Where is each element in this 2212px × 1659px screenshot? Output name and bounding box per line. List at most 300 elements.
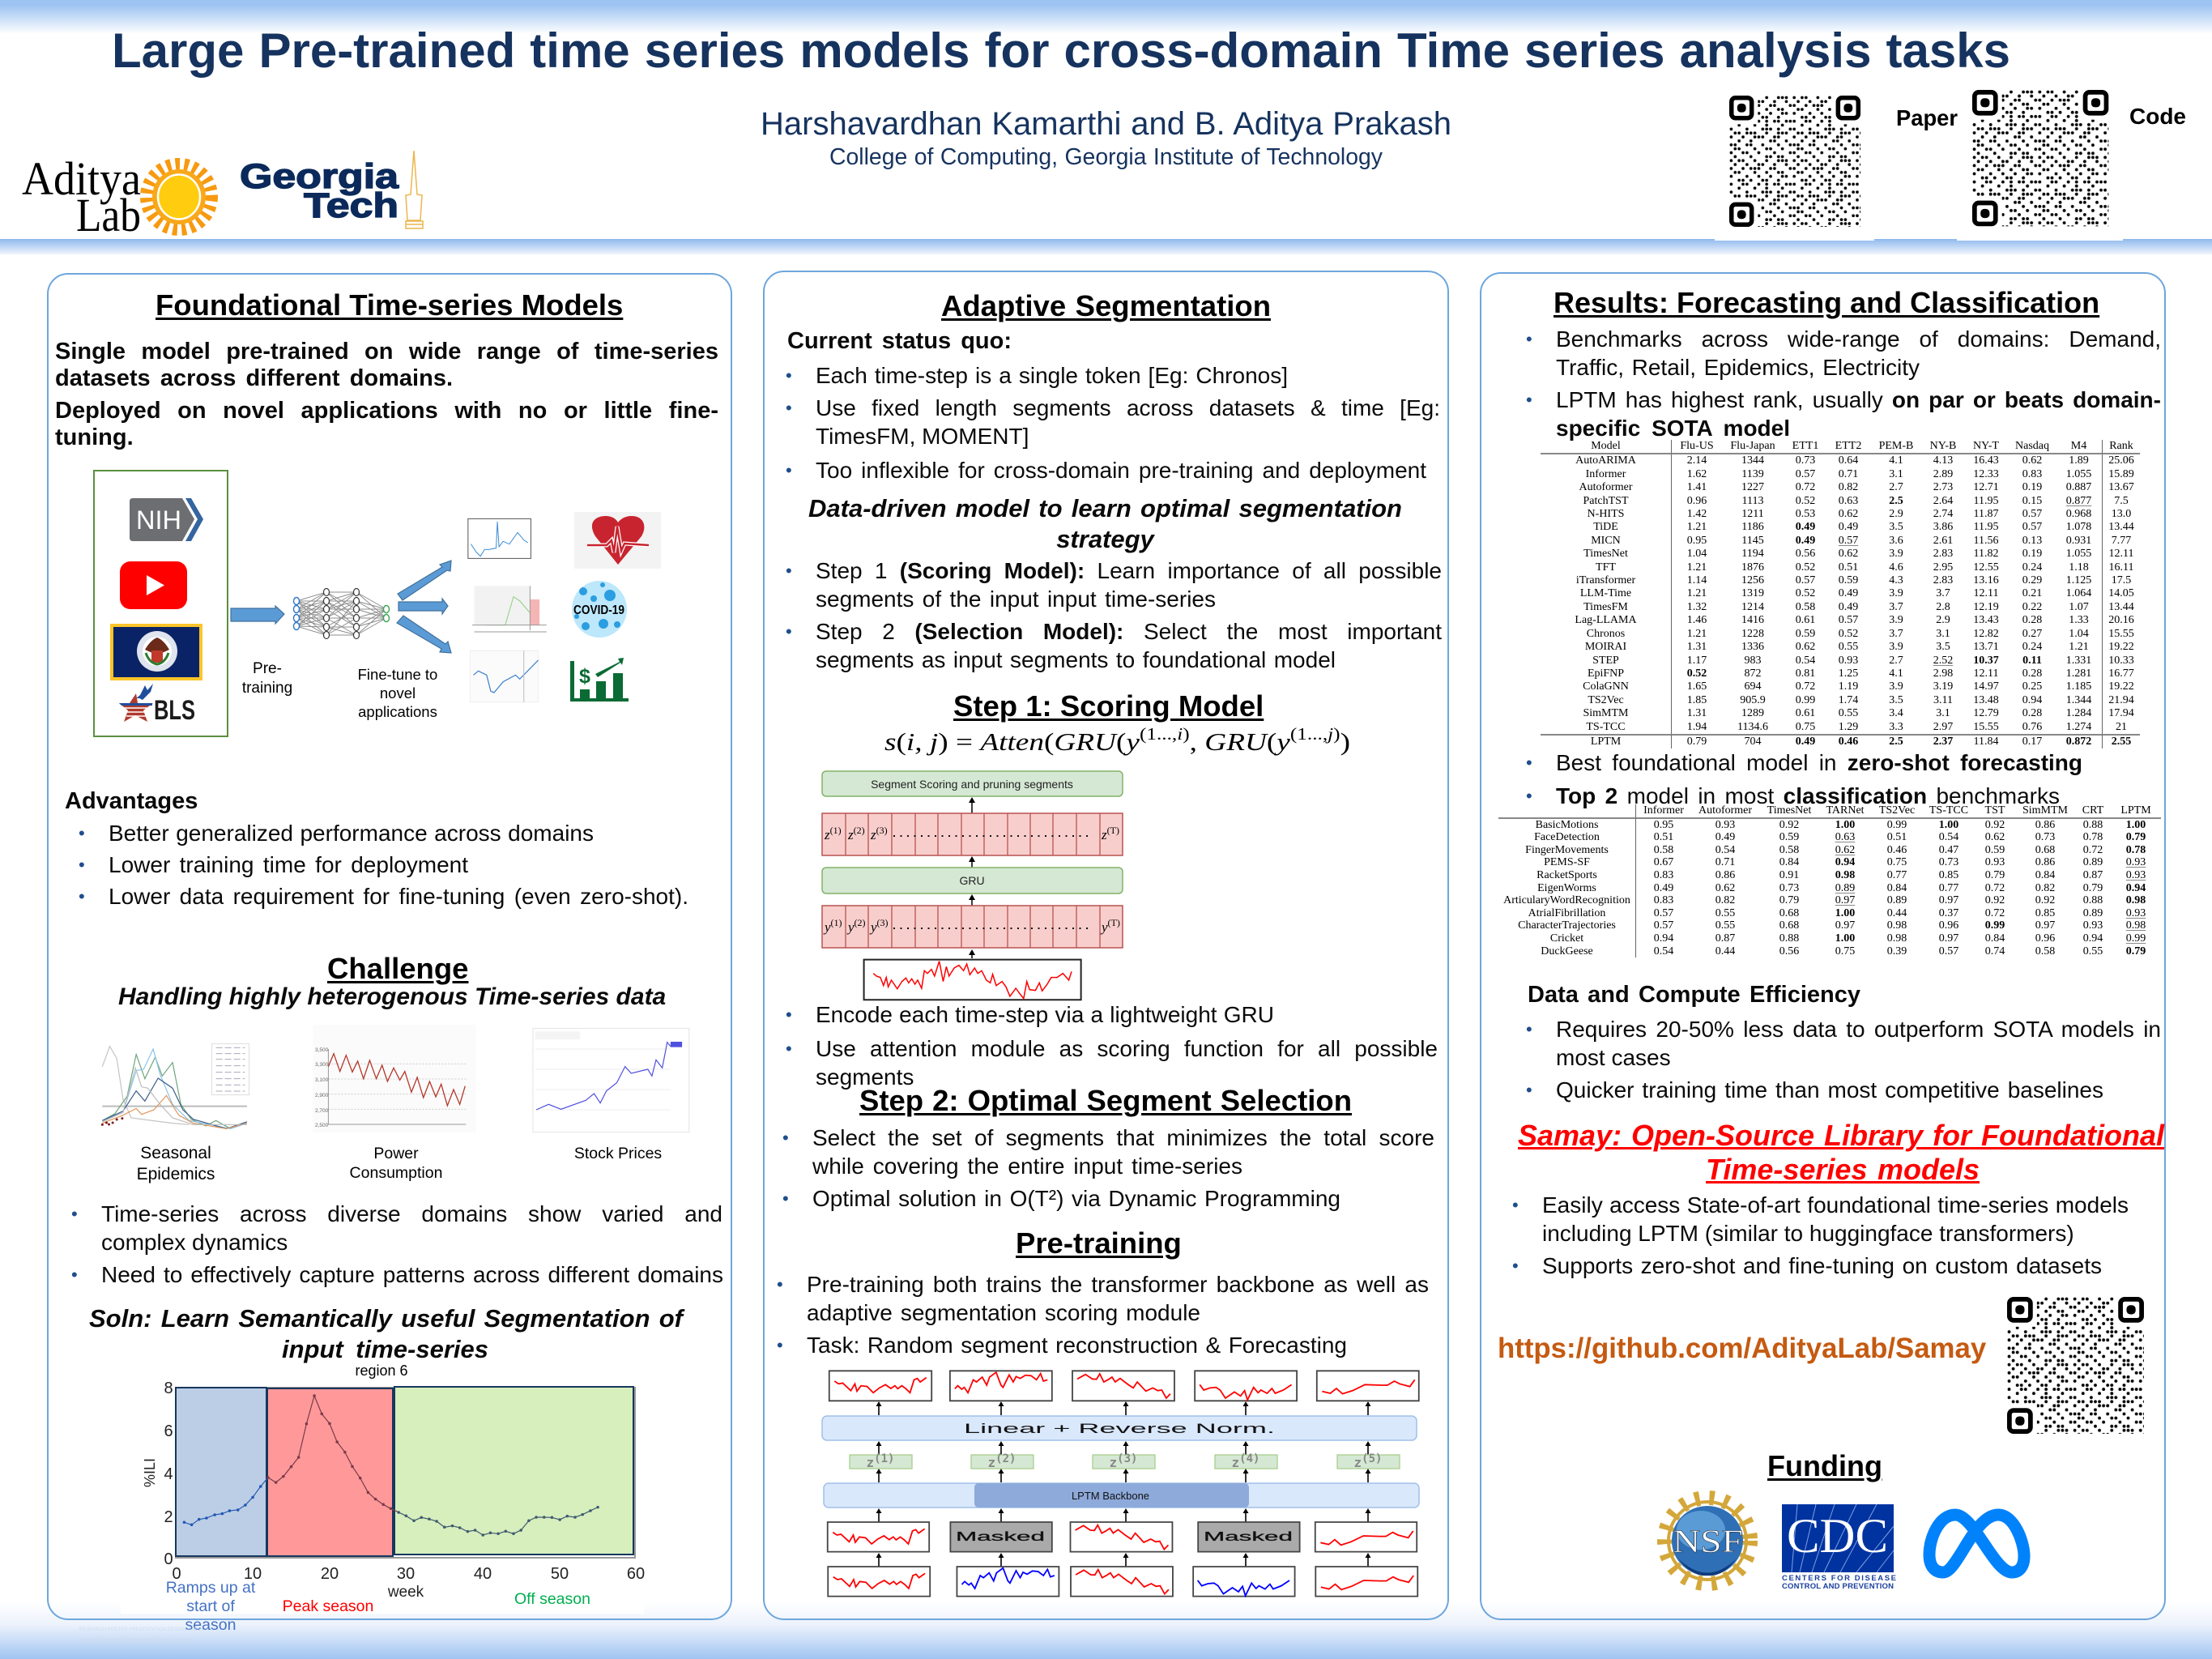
latent tokens: z xyxy=(1110,1455,1117,1470)
table: classification results: 0.72 xyxy=(1985,882,2005,894)
table: forecasting results: 2.73 xyxy=(1933,481,1953,493)
bullet: Pre-training both trains the transformer backbone as well as xyxy=(807,1272,1429,1297)
row: y tokens: (2) xyxy=(855,917,866,928)
bullet: Task: Random segment reconstruction & Forecasting xyxy=(807,1333,1347,1358)
bullet: Better generalized performance across domains xyxy=(109,821,594,846)
table: classification results: 0.55 xyxy=(1715,919,1735,932)
row: y tokens: y xyxy=(869,919,877,935)
trend charts: 3,300 xyxy=(315,1062,329,1068)
table: forecasting results: 3.9 xyxy=(1889,548,1903,560)
trend charts: 2,500 xyxy=(315,1123,329,1128)
table: forecasting results: 1.21 xyxy=(1687,628,1707,640)
table: forecasting results: 12.79 xyxy=(1973,707,1999,719)
table: forecasting results: 12.33 xyxy=(1973,468,1999,480)
table: forecasting results: 1.65 xyxy=(1687,680,1707,693)
table: forecasting results: 0.94 xyxy=(2022,694,2042,706)
heading: step 1: Step 1: Scoring Model xyxy=(953,689,1264,723)
row: z tokens: z xyxy=(1101,827,1107,842)
solution heading: Soln: Learn Semantically useful Segmentation of xyxy=(89,1304,683,1333)
table: forecasting results: 4.1 xyxy=(1889,667,1903,680)
row: z tokens: (3) xyxy=(876,825,888,836)
link: Samay repository: https://github.com/AdityaLab/Samay xyxy=(1498,1333,1986,1364)
chart: %ILI by week with seasonal regions: 0 xyxy=(172,1565,181,1583)
table: classification results: 0.72 xyxy=(1985,907,2005,919)
table: forecasting results: 1.74 xyxy=(1839,694,1858,706)
table: forecasting results: 12.11 xyxy=(2109,548,2133,560)
heading: Adaptive Segmentation xyxy=(941,289,1271,322)
region: off season xyxy=(394,1387,633,1555)
table: classification results: 0.75 xyxy=(1835,945,1855,957)
table: forecasting results: 1.331 xyxy=(2066,655,2091,666)
table: classification results: 0.89 xyxy=(2083,907,2103,919)
table: forecasting results: 10.37 xyxy=(1973,655,1999,666)
table: forecasting results: 1.19 xyxy=(1839,680,1858,693)
table: classification results: 0.92 xyxy=(1779,819,1799,831)
table: forecasting results: TimesFM xyxy=(1583,601,1628,613)
neural network xyxy=(293,588,389,638)
table: forecasting results: 21 xyxy=(2116,721,2127,733)
table: forecasting results: TFT xyxy=(1596,561,1616,574)
table: forecasting results: 0.99 xyxy=(1796,694,1815,706)
heading: Funding: Funding xyxy=(1767,1449,1882,1482)
bullet: Traffic, Retail, Epidemics, Electricity xyxy=(1556,355,1920,380)
logo: Aditya Lab: Lab xyxy=(76,189,141,241)
icon: COVID-19 xyxy=(572,581,627,638)
icon: NIH xyxy=(130,498,203,541)
label: Fine-tune to novel applications: Fine-tune to xyxy=(358,666,437,683)
chart: %ILI by week with seasonal regions: 0 xyxy=(164,1550,173,1568)
bullet: Lower data requirement for fine-tuning (even zero-shot). xyxy=(109,884,688,909)
table: forecasting results: Model xyxy=(1591,440,1621,452)
table: forecasting results: 17.94 xyxy=(2108,707,2134,719)
table: classification results: AtrialFibrillation xyxy=(1528,907,1605,919)
italic statement: strategy xyxy=(1056,525,1154,553)
table: classification results: 0.57 xyxy=(1939,945,1958,957)
table: classification results: CRT xyxy=(2082,804,2103,817)
intro text 2: tuning. xyxy=(55,424,134,450)
table: forecasting results: 0.55 xyxy=(1839,707,1858,719)
table: forecasting results: 0.49 xyxy=(1839,587,1858,599)
table: classification results: TimesNet xyxy=(1767,804,1811,817)
latent tokens: (3) xyxy=(1117,1452,1137,1465)
table: classification results: Cricket xyxy=(1550,932,1583,945)
table: classification results: 0.97 xyxy=(2035,919,2055,932)
footer watermark: RESEARCH POSTER PRESENTATION DESIGN © 2015 xyxy=(79,1627,203,1632)
icon: YouTube xyxy=(120,561,187,609)
table: classification results: BasicMotions xyxy=(1536,819,1598,831)
table: forecasting results: 2.61 xyxy=(1933,535,1953,547)
table: classification results: ArticularyWordRecognition xyxy=(1503,894,1630,906)
table: classification results: 0.59 xyxy=(1985,844,2005,856)
table: forecasting results: Rank xyxy=(2109,440,2133,452)
bullet: Time-series across diverse domains show varied and xyxy=(101,1201,722,1226)
table: forecasting results: MOIRAI xyxy=(1585,641,1626,653)
table: forecasting results: 3.7 xyxy=(1889,628,1903,640)
label: Stock Prices: Stock Prices xyxy=(574,1145,662,1162)
table: forecasting results: 1.21 xyxy=(2069,641,2089,653)
table: forecasting results: 1.21 xyxy=(1687,561,1707,574)
table: forecasting results: 0.49 xyxy=(1796,535,1815,547)
table: classification results: 0.49 xyxy=(1654,882,1673,894)
table: forecasting results: LLM-Time xyxy=(1580,587,1631,599)
table: forecasting results: 0.28 xyxy=(2022,667,2042,680)
table: forecasting results: 1186 xyxy=(1741,521,1764,533)
row: z tokens: (T) xyxy=(1107,825,1119,836)
table: forecasting results: 16.11 xyxy=(2109,561,2133,574)
table: classification results: 0.57 xyxy=(1654,907,1673,919)
footer watermark: www.PosterPresentations.com xyxy=(79,1636,190,1645)
latent tokens: z xyxy=(1354,1455,1362,1470)
table: forecasting results: 25.06 xyxy=(2108,454,2134,467)
table: classification results: 0.82 xyxy=(1715,894,1735,906)
table: forecasting results: 983 xyxy=(1745,655,1761,666)
table: forecasting results: 13.16 xyxy=(1973,574,1999,586)
bullet: TimesFM, MOMENT] xyxy=(816,424,1029,449)
table: forecasting results: 13.67 xyxy=(2108,481,2134,493)
bullet xyxy=(816,394,1440,450)
table: classification results: TS2Vec xyxy=(1879,804,1915,817)
table: classification results: 0.96 xyxy=(2035,932,2055,945)
bullet: Top 2 model in most classification benchmarks xyxy=(1556,783,2060,808)
table: forecasting results: 12.82 xyxy=(1973,628,1999,640)
table: forecasting results: 1.42 xyxy=(1687,508,1707,520)
bullet: step 2 xyxy=(816,617,1442,674)
table: classification results: 0.84 xyxy=(1887,882,1907,894)
thumbnail charts xyxy=(468,518,547,702)
footer watermark xyxy=(79,1627,203,1645)
label: Seasonal Epidemics: Epidemics xyxy=(137,1165,215,1183)
logo: NSF xyxy=(1664,1498,1750,1584)
table: forecasting results: Informer xyxy=(1586,468,1626,480)
table: classification results: 0.94 xyxy=(1654,932,1673,945)
table: classification results: 0.73 xyxy=(1939,856,1958,868)
table: forecasting results: 0.25 xyxy=(2022,680,2042,693)
table: forecasting results: 0.968 xyxy=(2066,508,2091,520)
table: forecasting results: 0.64 xyxy=(1839,454,1858,467)
table: forecasting results: 4.1 xyxy=(1889,454,1903,467)
table: forecasting results: 694 xyxy=(1745,680,1761,693)
table: forecasting results: 0.73 xyxy=(1796,454,1815,467)
table: forecasting results: 1.25 xyxy=(1839,667,1858,680)
diagram: pre-training architecture xyxy=(822,1371,1419,1597)
table: forecasting results: 1227 xyxy=(1741,481,1764,493)
table: forecasting results: 2.5 xyxy=(1889,495,1903,507)
table: classification results: 0.62 xyxy=(1715,882,1735,894)
table: forecasting results: Lag-LLAMA xyxy=(1575,614,1637,626)
icon: BLS: BLS xyxy=(154,695,195,726)
table: forecasting results: 2.83 xyxy=(1933,574,1953,586)
chart: %ILI by week with seasonal regions: 50 xyxy=(551,1565,569,1583)
chart: %ILI by week with seasonal regions: 4 xyxy=(164,1465,173,1483)
table: forecasting results: 0.79 xyxy=(1687,736,1707,748)
table: forecasting results: 4.13 xyxy=(1933,454,1953,467)
masked input row xyxy=(828,1522,1417,1552)
table: forecasting results: 12.11 xyxy=(1973,587,1998,599)
table: forecasting results: Chronos xyxy=(1587,628,1625,640)
block: linear + reverse norm xyxy=(822,1416,1417,1440)
table: forecasting results: 0.46 xyxy=(1839,736,1858,748)
table: classification results: 0.89 xyxy=(1835,882,1855,894)
table: classification results: 0.97 xyxy=(1939,932,1958,945)
table: classification results: 0.98 xyxy=(2126,894,2146,906)
block: LPTM backbone: LPTM Backbone xyxy=(1072,1490,1149,1502)
table: forecasting results: 1.274 xyxy=(2066,721,2091,733)
bullet xyxy=(1556,1015,2161,1072)
icon: Federal Reserve seal xyxy=(112,625,201,679)
table: classification results: 0.39 xyxy=(1887,945,1907,957)
table: forecasting results: EpiFNP xyxy=(1588,667,1624,680)
table: forecasting results: 1.33 xyxy=(2069,614,2089,626)
table: forecasting results: 4.3 xyxy=(1889,574,1903,586)
table: forecasting results: 3.3 xyxy=(1889,721,1903,733)
table: forecasting results: 0.57 xyxy=(1839,535,1858,547)
table: classification results: 0.79 xyxy=(1779,894,1799,906)
table: classification results: 0.82 xyxy=(2035,882,2055,894)
table: forecasting results: 0.76 xyxy=(2022,721,2042,733)
table: forecasting results: 0.52 xyxy=(1839,628,1858,640)
table: classification results: 0.79 xyxy=(2126,945,2146,957)
icon: finance growth: $ xyxy=(579,665,590,688)
table: classification results: 1.00 xyxy=(1939,819,1958,831)
table: forecasting results: PEM-B xyxy=(1879,440,1913,452)
bullet: Benchmarks across wide-range of domains: Demand, xyxy=(1556,326,2161,352)
table: forecasting results: 1.62 xyxy=(1687,468,1707,480)
table: classification results: 0.99 xyxy=(1887,819,1907,831)
table: classification results: 0.88 xyxy=(2083,819,2103,831)
block: segment scoring: Segment Scoring and pruning segments xyxy=(871,778,1073,791)
table: forecasting results: 0.57 xyxy=(1796,468,1815,480)
table: forecasting results: NY-T xyxy=(1973,440,1999,452)
logo: Georgia Tech: Tech xyxy=(304,186,399,225)
table: forecasting results: 11.87 xyxy=(1973,508,1998,520)
table: forecasting results: 1256 xyxy=(1741,574,1764,586)
table: forecasting results: 10.33 xyxy=(2108,655,2134,666)
output series row xyxy=(829,1371,1419,1401)
table: forecasting results: 0.57 xyxy=(2022,521,2042,533)
table: forecasting results: 0.19 xyxy=(2022,481,2042,493)
table: forecasting results: Flu-US xyxy=(1680,440,1714,452)
data sources box xyxy=(94,471,228,736)
chart: %ILI by week with seasonal regions: %ILI xyxy=(142,1458,158,1487)
table: classification results: 0.94 xyxy=(2083,932,2103,945)
heading: pre-training: Pre-training xyxy=(1016,1226,1182,1260)
table: forecasting results: 1.04 xyxy=(2069,628,2089,640)
table: forecasting results: 12.55 xyxy=(1973,561,1999,574)
chart: %ILI by week with seasonal regions: 8 xyxy=(164,1380,173,1397)
trend charts: 3,100 xyxy=(315,1077,329,1083)
table: classification results: 0.58 xyxy=(1654,844,1673,856)
table: forecasting results: 1.29 xyxy=(1839,721,1858,733)
intro text: Single model pre-trained on wide range of time-series xyxy=(55,339,718,365)
table: forecasting results: 2.55 xyxy=(2112,736,2131,748)
arrows: fine-tune branches xyxy=(397,561,451,653)
formula: s(i, j) = Atten (GRU (y xyxy=(884,727,1137,756)
intro text: datasets across different domains. xyxy=(55,365,453,391)
block: segment scoring xyxy=(822,771,1123,796)
table: classification results: 0.84 xyxy=(1985,932,2005,945)
logo: CDC: CDC xyxy=(1787,1509,1888,1563)
table: classification results xyxy=(1498,804,2161,957)
chart: %ILI by week with seasonal regions: 2 xyxy=(164,1508,173,1526)
table: forecasting results: 1.94 xyxy=(1687,721,1707,733)
table: classification results: 0.54 xyxy=(1715,844,1735,856)
bullet: Requires 20-50% less data to outperform SOTA models in xyxy=(1556,1017,2161,1042)
label: Power Consumption: Power xyxy=(373,1145,419,1162)
table: forecasting results: 0.57 xyxy=(1839,614,1858,626)
table: forecasting results: 1336 xyxy=(1741,641,1764,653)
table: forecasting results: 1.185 xyxy=(2066,680,2091,693)
table: classification results: 0.68 xyxy=(1779,919,1799,932)
table: forecasting results: 11.84 xyxy=(1973,736,1998,748)
trend charts xyxy=(102,1025,689,1183)
table: classification results: 0.46 xyxy=(1887,844,1907,856)
table: classification results: RacketSports xyxy=(1536,869,1597,881)
formula: (1..., i) xyxy=(1140,724,1188,744)
label: Paper: Paper xyxy=(1896,105,1958,130)
table: classification results: 0.57 xyxy=(1654,919,1673,932)
table: classification results: 0.95 xyxy=(1654,819,1673,831)
heading: Advantages: Advantages xyxy=(65,788,198,814)
table: forecasting results: 0.62 xyxy=(1839,548,1858,560)
logo: CDC: CENTERS FOR DISEASE xyxy=(1782,1574,1896,1583)
table: forecasting results: Autoformer xyxy=(1579,481,1633,493)
table: forecasting results: 1228 xyxy=(1741,628,1764,640)
trend charts: 2,900 xyxy=(315,1093,329,1098)
table: classification results: 0.87 xyxy=(2083,869,2103,881)
table: forecasting results: 0.53 xyxy=(1796,508,1815,520)
table: forecasting results: 14.97 xyxy=(1973,680,1999,693)
table: forecasting results: 1.46 xyxy=(1687,614,1707,626)
box: input time series xyxy=(864,960,1081,1000)
table: forecasting results: 3.5 xyxy=(1936,641,1950,653)
trend charts: 2,700 xyxy=(315,1108,329,1114)
label: Ramps up at start of season: start of xyxy=(186,1597,235,1615)
table: forecasting results: 4.6 xyxy=(1889,561,1903,574)
table: forecasting results: 0.49 xyxy=(1839,521,1858,533)
table: classification results: 0.93 xyxy=(2126,907,2146,919)
table: forecasting results: 1.17 xyxy=(1687,655,1707,666)
table: classification results: Informer xyxy=(1643,804,1684,817)
table: forecasting results: Flu-Japan xyxy=(1730,440,1775,452)
table: classification results: 1.00 xyxy=(1835,932,1855,945)
table: classification results: 0.67 xyxy=(1654,856,1673,868)
row: z tokens: z xyxy=(824,827,830,842)
region: peak season xyxy=(267,1388,393,1556)
table: classification results: 0.73 xyxy=(1779,882,1799,894)
table: forecasting results: 1.064 xyxy=(2066,587,2091,599)
table: forecasting results: 3.6 xyxy=(1889,535,1903,547)
logo: CDC: CONTROL AND PREVENTION xyxy=(1782,1582,1894,1591)
table: forecasting results: 1.32 xyxy=(1687,601,1707,613)
table: classification results: 0.68 xyxy=(2035,844,2055,856)
bullet: step 1: segments of the input input time-series xyxy=(816,586,1216,612)
table: forecasting results: 2.83 xyxy=(1933,548,1953,560)
table: classification results: 0.83 xyxy=(1654,869,1673,881)
table: forecasting results: 0.872 xyxy=(2066,736,2091,748)
bullet: Too inflexible for cross-domain pre-training and deployment xyxy=(816,458,1426,483)
table: forecasting results: 15.55 xyxy=(1973,721,1999,733)
table: forecasting results: 0.27 xyxy=(2022,628,2042,640)
table: forecasting results: 1876 xyxy=(1741,561,1764,574)
table: forecasting results: 0.29 xyxy=(2022,574,2042,586)
table: forecasting results: 3.7 xyxy=(1889,601,1903,613)
formula: GRU (y xyxy=(1204,727,1288,756)
table: classification results: DuckGeese xyxy=(1541,945,1593,957)
table: classification results: LPTM xyxy=(2120,804,2151,817)
table: classification results: 0.71 xyxy=(1715,856,1735,868)
bullet: step 1: Step 1 (Scoring Model): Learn importance of all possible xyxy=(816,558,1442,583)
table: forecasting results: 0.52 xyxy=(1796,561,1815,574)
table: classification results: FaceDetection xyxy=(1534,831,1600,843)
table: forecasting results: 3.9 xyxy=(1889,680,1903,693)
table: forecasting results: 0.28 xyxy=(2022,707,2042,719)
bullet xyxy=(1542,1191,2129,1247)
intro text xyxy=(55,339,718,391)
icon: COVID-19: COVID-19 xyxy=(573,603,624,617)
QR code: Samay xyxy=(2006,1296,2145,1435)
panel: Adaptive Segmentation xyxy=(763,271,1449,1620)
table: classification results: 0.79 xyxy=(1985,869,2005,881)
chart: %ILI by week with seasonal regions xyxy=(121,1363,645,1634)
arrow: pre-training xyxy=(231,606,284,624)
original input row xyxy=(828,1567,1417,1597)
row: y tokens: y xyxy=(846,919,855,935)
table: forecasting results: 0.82 xyxy=(1839,481,1858,493)
chart: %ILI by week with seasonal regions: 60 xyxy=(627,1565,645,1583)
table: forecasting results: 7.5 xyxy=(2114,495,2129,507)
bullet: most cases xyxy=(1556,1045,1671,1070)
table: classification results: 0.96 xyxy=(1939,919,1958,932)
table: forecasting results: 1.89 xyxy=(2069,454,2089,467)
chart: stock prices xyxy=(533,1028,689,1132)
table: forecasting results: 3.9 xyxy=(1889,587,1903,599)
table: forecasting results: 0.877 xyxy=(2066,495,2091,507)
table: forecasting results: 0.96 xyxy=(1687,495,1707,507)
table: forecasting results: 1.055 xyxy=(2066,468,2091,480)
label: Masked: Masked xyxy=(956,1530,1045,1544)
bullet xyxy=(101,1200,722,1256)
table: classification results: 0.92 xyxy=(2035,894,2055,906)
table: forecasting results: TimesNet xyxy=(1583,548,1628,560)
table: forecasting results: 2.7 xyxy=(1889,655,1903,666)
diagram: pre-training to fine-tuning pipeline xyxy=(94,471,661,736)
table: classification results: 0.44 xyxy=(1887,907,1907,919)
table: classification results: 0.85 xyxy=(1939,869,1958,881)
logo: Georgia Tech xyxy=(240,151,423,228)
bullet: step 2: Step 2 (Selection Model): Select the most important xyxy=(816,619,1442,644)
table: forecasting results: 12.71 xyxy=(1973,481,1999,493)
table: classification results: 0.78 xyxy=(2126,844,2146,856)
bullet: Each time-step is a single token [Eg: Chronos] xyxy=(816,363,1288,388)
table: forecasting results: AutoARIMA xyxy=(1575,454,1636,467)
table: forecasting results: 0.24 xyxy=(2022,561,2042,574)
table: forecasting results: 1.14 xyxy=(1687,574,1707,586)
table: forecasting results: 3.5 xyxy=(1889,694,1903,706)
bullet: Select the set of segments that minimizes the total score xyxy=(812,1125,1434,1150)
row: y tokens: y xyxy=(823,919,831,935)
table: classification results: 0.55 xyxy=(2083,945,2103,957)
table: forecasting results: 1.07 xyxy=(2069,601,2089,613)
table: forecasting results: 0.57 xyxy=(1796,574,1815,586)
table: forecasting results: 0.52 xyxy=(1796,495,1815,507)
table: classification results: 0.93 xyxy=(1715,819,1735,831)
chart: %ILI by week with seasonal regions: 20 xyxy=(321,1565,339,1583)
table: forecasting results: 2.7 xyxy=(1889,481,1903,493)
table: forecasting results: 0.11 xyxy=(2022,655,2042,666)
table: classification results: 0.91 xyxy=(1779,869,1799,881)
table: forecasting results: 3.5 xyxy=(1889,521,1903,533)
table: forecasting results: 19.22 xyxy=(2108,680,2134,693)
